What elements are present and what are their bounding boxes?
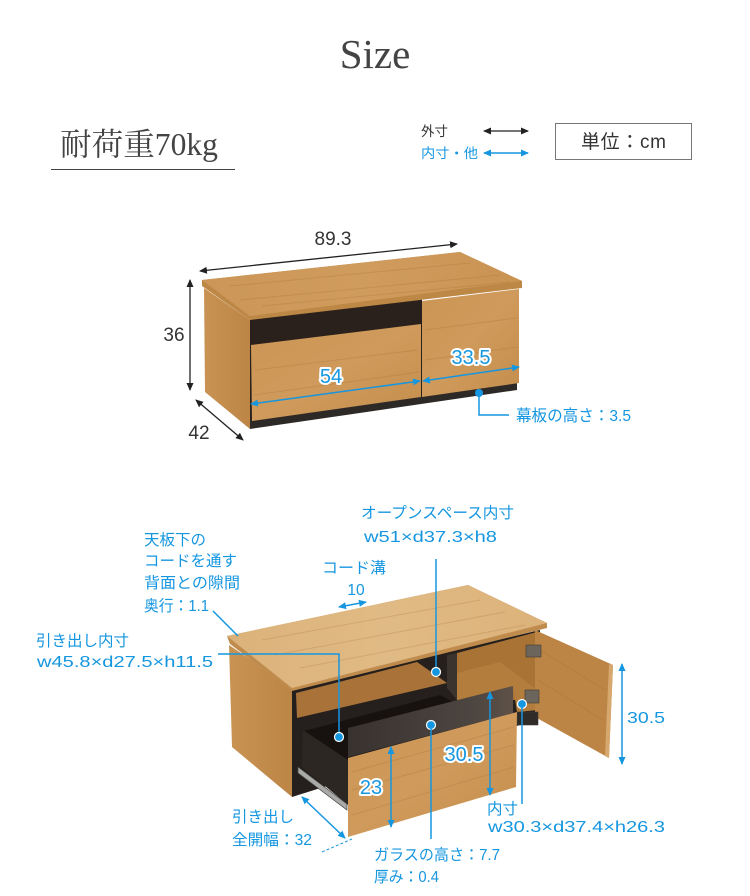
callout: drawer inner size (36, 632, 344, 742)
label: cord gap behind top board: 天板下の (144, 531, 206, 549)
callout: open space inner size: w51×d37.3×h8 (363, 529, 497, 546)
callout: drawer inner size: 引き出し内寸 (36, 632, 129, 650)
hinges (517, 645, 541, 725)
dimension: drawer height 23: 23 (360, 777, 382, 799)
dimension: height 36 (163, 280, 190, 390)
right compartment back (457, 632, 537, 712)
legend: outer and inner dimension arrows: 外寸 (421, 124, 448, 139)
dimension: drawer height 23 (360, 747, 391, 827)
unit box: cm: 単位：cm (581, 131, 666, 153)
slide rail (298, 767, 347, 810)
drawer front (348, 712, 517, 837)
title: Size: Size (340, 31, 410, 77)
base plinth (250, 382, 517, 429)
dimension: depth 42 (188, 400, 243, 444)
callout: plinth height 3.5: 幕板の高さ：3.5 (516, 407, 631, 425)
glass panel (348, 686, 513, 757)
left side panel (204, 288, 250, 429)
legend: outer and inner dimension arrows (421, 124, 528, 161)
dimension: compartment height 30.5: 30.5 (445, 744, 483, 766)
callout: drawer inner size: w45.8×d27.5×h11.5 (36, 654, 213, 671)
dimension: width 89.3: 89.3 (315, 229, 351, 250)
label: cord gap behind top board (144, 531, 240, 636)
dimension: drawer width 54 (251, 366, 420, 404)
dimension: drawer width 54: 54 (320, 366, 342, 388)
callout: open space inner size: オープンスペース内寸 (361, 504, 514, 522)
callout: glass height: 厚み：0.4 (374, 869, 439, 886)
open space wood back (296, 662, 447, 718)
legend: outer and inner dimension arrows: 内寸・他 (421, 146, 478, 161)
left side panel (229, 645, 292, 797)
label: cord gap behind top board: 奥行：1.1 (144, 597, 209, 615)
dimension: compartment height 30.5 (445, 692, 490, 795)
drawer side (302, 730, 348, 805)
dimension: height 36: 36 (163, 325, 185, 346)
callout: glass height (374, 720, 500, 886)
callout: compartment inner size (487, 700, 665, 836)
interior dark carcass (292, 630, 540, 797)
heading: load capacity 70kg: 耐荷重70kg (60, 127, 218, 162)
dimension: drawer full opening 32: 全開幅：32 (232, 831, 312, 849)
divider (447, 653, 457, 700)
dimension: drawer full opening 32: 引き出し (232, 808, 294, 826)
top board (227, 585, 547, 691)
carcass backing, dark (250, 298, 422, 425)
door (535, 630, 613, 758)
label: cord groove 10: 10 (347, 582, 365, 599)
label: cord groove 10 (322, 559, 386, 607)
right compartment floor (457, 662, 537, 712)
door front (422, 289, 519, 397)
unit box: cm (556, 124, 692, 160)
callout: glass height: ガラスの高さ：7.7 (374, 846, 500, 864)
product diagram: closed TV board (202, 252, 522, 429)
dimension: door height 30.5: 30.5 (627, 710, 665, 727)
drawer front (251, 324, 421, 421)
dimension: door width 33.5 (423, 347, 519, 381)
dimension: door height 30.5 (622, 664, 665, 764)
top board (202, 252, 522, 320)
callout: plinth height 3.5 (475, 389, 631, 425)
dimension: door width 33.5: 33.5 (452, 347, 490, 369)
dimension: depth 42: 42 (188, 423, 210, 444)
product diagram: opened TV board (227, 585, 613, 837)
label: cord groove 10: コード溝 (322, 559, 386, 577)
dimension: width 89.3 (200, 229, 457, 271)
dimension: drawer full opening 32 (232, 797, 352, 852)
drawer inner (304, 695, 453, 760)
label: cord gap behind top board: 背面との隙間 (144, 574, 240, 592)
label: cord gap behind top board: コードを通す (144, 552, 237, 570)
callout: compartment inner size: 内寸 (487, 800, 518, 818)
callout: compartment inner size: w30.3×d37.4×h26.3 (487, 819, 665, 836)
callout: open space inner size (361, 504, 514, 676)
